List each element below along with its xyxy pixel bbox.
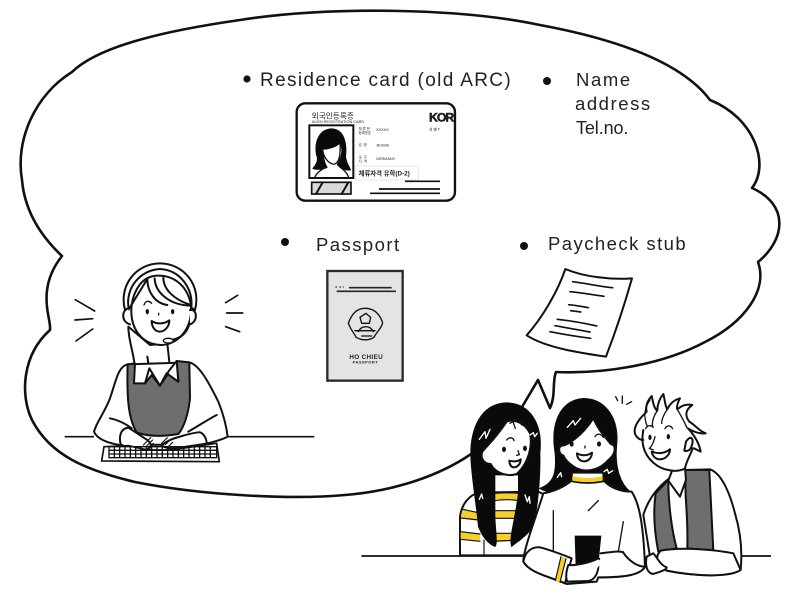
friend right: man with vest [616,394,741,575]
torso arms [94,362,228,446]
friend center: sweater and phone [523,398,645,584]
earpiece and microphone [190,310,196,324]
arm creases [110,415,217,432]
residence card illustration: JESSIE [376,143,390,147]
headset band [124,263,196,310]
text block: name, address, tel: Tel.no. [576,118,628,138]
residence card illustration: 체 류 번 [359,126,370,131]
residence card illustration: GERMANY [376,157,396,161]
friend left: striped shirt [460,403,545,555]
residence card illustration: 국 가 [359,154,367,159]
face [144,301,174,332]
vest [127,361,190,436]
bullet: paycheck stub: Paycheck stub [548,233,687,254]
paycheck stub illustration [527,269,632,357]
head [131,276,191,345]
table line [361,553,771,559]
collar [145,361,178,386]
passport illustration [327,271,403,381]
passport illustration: PASSPORT [353,359,378,364]
text block: name, address, tel: address [575,93,652,114]
residence card illustration: 등록번호 [359,130,371,135]
hair back and neck [128,327,170,383]
text block: name, address, tel [543,69,652,138]
ear [123,308,130,324]
residence card illustration [297,103,455,201]
residence card illustration: ALIEN REGISTRATION CARD [312,120,364,124]
call center agent with headset [65,263,314,462]
residence card illustration: 성 별 F [429,127,441,132]
bullet: residence card: Residence card (old ARC) [260,70,512,91]
emphasis marks [75,295,243,341]
residence card illustration: 체류자격 유학(D-2) [359,168,410,177]
residence card illustration: KOR [429,111,454,125]
bullet: passport: Passport [316,234,401,255]
residence card illustration: XXXXX [376,128,389,132]
residence card illustration: 외국인등록증 [312,111,354,121]
hair fringe [128,278,191,310]
residence card illustration: 지 역 [359,158,367,163]
group of three friends [361,394,771,584]
desk line [65,434,314,439]
speech bubble outline [21,11,779,497]
residence card illustration: 성 명 [359,142,367,147]
passport illustration: HO CHIEU [349,354,383,361]
keyboard [102,443,219,462]
text block: name, address, tel: Name [576,69,632,90]
hands [120,428,151,450]
